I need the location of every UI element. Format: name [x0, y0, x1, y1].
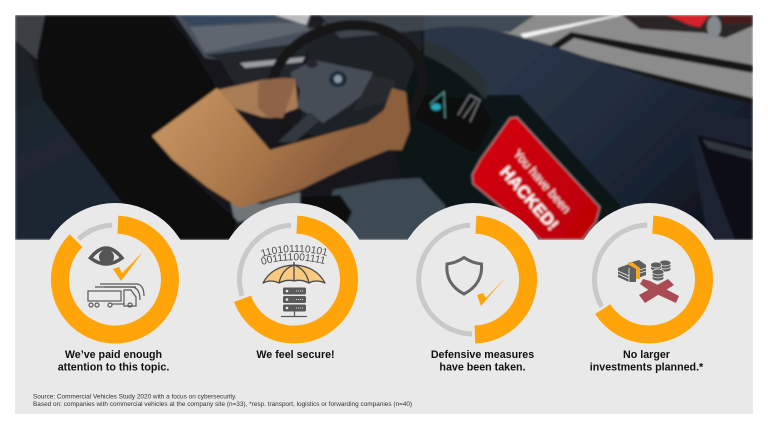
source note: Source: Commercial Vehicles Study 2020 with a focus on cybersecurity.	[33, 394, 237, 400]
stat 1: paid enough attention	[50, 203, 180, 373]
icon: banknote stacks	[618, 260, 646, 282]
icon: eye	[90, 248, 122, 264]
road seen through windshield	[501, 15, 753, 100]
icon: umbrella	[263, 262, 325, 283]
black windshield strips	[550, 32, 753, 73]
label: Defensive measures	[431, 349, 534, 361]
icon: check mark	[113, 252, 143, 281]
icon: shield	[447, 258, 482, 294]
icon: trucks	[88, 284, 144, 307]
source note	[33, 394, 412, 408]
grey content panel	[15, 240, 753, 414]
stat 4: no larger investments: investments planned.*	[590, 362, 704, 374]
dashboard	[424, 26, 753, 240]
interior behind the wheel	[302, 32, 422, 136]
side window and door trim	[175, 15, 330, 62]
red car	[622, 15, 753, 38]
stat 3: defensive measures: have been taken.	[439, 362, 526, 374]
stat 2: feel secure	[228, 203, 360, 361]
center console	[395, 47, 620, 220]
steering wheel	[268, 19, 428, 144]
stat 4: no larger investments	[584, 203, 714, 373]
icon: binary digits: 001111001111	[261, 253, 324, 264]
icon: check mark	[477, 277, 506, 306]
far arm	[217, 78, 298, 118]
torso in black shirt	[37, 15, 237, 240]
icon: red cross	[639, 279, 679, 303]
icon: server stack	[281, 288, 307, 316]
hacked red panel	[472, 117, 600, 240]
near arm	[152, 88, 410, 208]
near hand on wheel	[258, 78, 296, 118]
instrument displays	[430, 92, 480, 122]
denim leg	[320, 178, 450, 240]
hacked red panel: HACKED!	[496, 163, 562, 234]
hacked red panel: You have been	[511, 147, 573, 216]
icon: coin stacks	[650, 260, 671, 281]
label: No larger	[623, 349, 670, 361]
label: We feel secure!	[256, 349, 335, 361]
icon: binary digits: 110101110101	[261, 245, 327, 257]
source note: Based on: companies with commercial vehicles at the company site (n=33), *resp. transport, logistics or forwarding companies (n=40)	[33, 401, 412, 408]
lane marking	[520, 15, 623, 38]
right door panel	[698, 120, 753, 240]
cab interior behind the seat	[15, 15, 48, 60]
photo: truck cockpit with hacked display	[15, 11, 753, 240]
stat 3: defensive measures	[408, 203, 538, 370]
label: We’ve paid enough	[65, 349, 162, 361]
stat 1: paid enough attention: attention to this topic.	[58, 362, 169, 374]
seat	[15, 43, 124, 240]
